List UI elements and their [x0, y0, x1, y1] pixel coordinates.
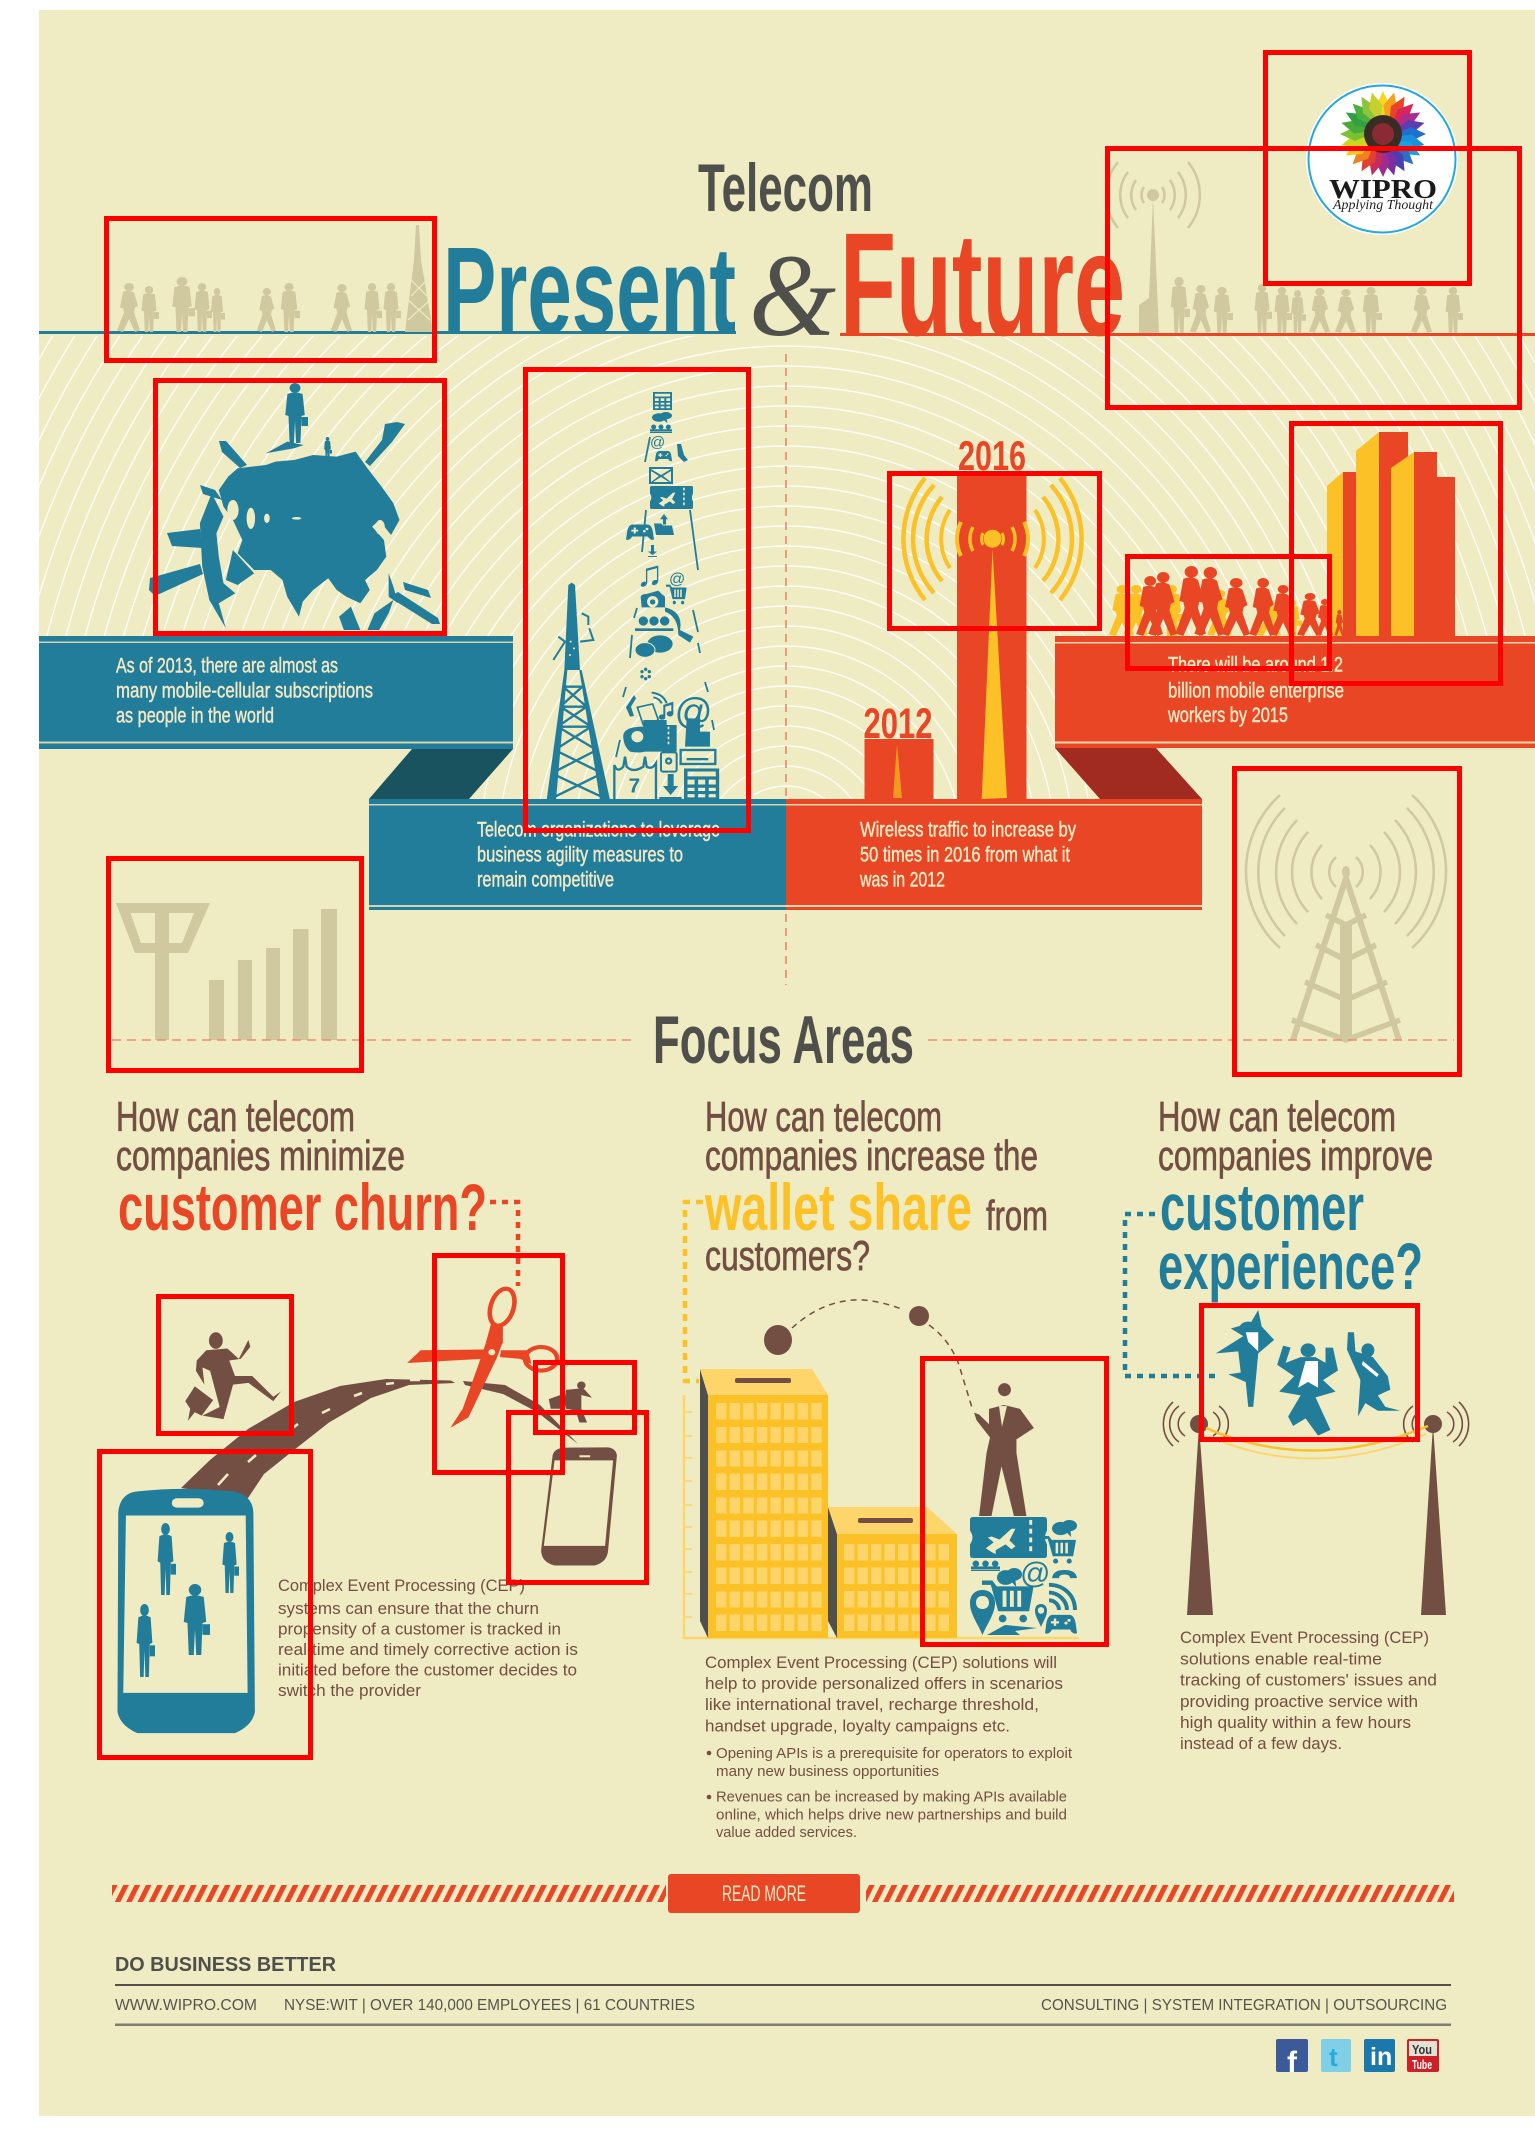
upper stacked icons: @: [669, 571, 685, 588]
title: Future: Future: [840, 203, 1125, 367]
road between phones: [181, 1379, 578, 1498]
tower outline dashes: [616, 437, 714, 757]
column 1 body text: propensity of a customer is tracked in: [278, 1620, 561, 1638]
icon: facebook: [1276, 2039, 1308, 2079]
year 2012 label: 2012: [864, 700, 932, 748]
figures round the globe: [149, 422, 440, 624]
teal band: subscriptions: [39, 636, 513, 749]
teal horizon line: [39, 331, 736, 334]
social icons: [1276, 2039, 1439, 2079]
column 1 body text: systems can ensure that the churn: [278, 1600, 539, 1618]
question 3: companies improve: [1158, 1132, 1433, 1179]
column 3 body text: solutions enable real-time: [1180, 1650, 1382, 1668]
question 1: customer churn?: [118, 1170, 487, 1244]
customers on screen: [137, 1523, 239, 1677]
big teal phone with customers: [118, 1489, 255, 1733]
footer website: WWW.WIPRO.COM: [115, 1997, 257, 2014]
dotted connector: wallet share: [685, 1202, 703, 1381]
column 2 body text: Complex Event Processing (CEP) solutions will: [705, 1654, 1057, 1672]
question 3: [1158, 1093, 1433, 1303]
signal bars icon: [116, 903, 337, 1040]
column 3 body text: tracking of customers' issues and: [1180, 1672, 1437, 1690]
bullet points: value added services.: [716, 1824, 857, 1841]
focus areas divider left: [112, 1039, 633, 1041]
sunflower mark: [1340, 91, 1426, 177]
tall building: [700, 1369, 828, 1638]
ribbon fold right: [1055, 748, 1202, 799]
signal waves: [903, 478, 1082, 600]
dotted connector: churn: [490, 1202, 518, 1286]
centre dashed divider: [785, 354, 787, 985]
upper stacked icons: @: [650, 434, 665, 451]
question 1: How can telecom: [116, 1093, 355, 1140]
ribbon text: 50 times in 2016 from what it: [860, 844, 1070, 867]
upper stacked icons: ♫: [636, 553, 663, 594]
column 3 body text: Complex Event Processing (CEP): [1180, 1629, 1429, 1647]
bullet points: many new business opportunities: [716, 1763, 939, 1780]
antenna with signal: [1106, 162, 1200, 333]
read more button: [668, 1874, 860, 1913]
2012 bar with label: [864, 700, 934, 799]
antenna spike: [982, 549, 1007, 799]
bullet points: Opening APIs is a prerequisite for operators to exploit: [716, 1745, 1073, 1762]
lower stacked icons: 7: [629, 775, 640, 798]
footer slogan: DO BUSINESS BETTER: [115, 1954, 337, 1976]
ribbon text: business agility measures to: [477, 844, 683, 867]
jumping customers trio: [1216, 1310, 1400, 1436]
footer company facts: NYSE:WIT | OVER 140,000 EMPLOYEES | 61 COUNTRIES: [284, 1997, 695, 2014]
ribbon text: remain competitive: [477, 869, 614, 892]
icon: youtube: Tube: [1412, 2057, 1432, 2072]
question 2: wallet share: [704, 1170, 972, 1244]
column 1 body text: switch the provider: [278, 1682, 422, 1700]
piggy bank buildings chart: [684, 1369, 1079, 1638]
column 3 body text: providing proactive service with: [1180, 1693, 1418, 1711]
icon: facebook: f: [1287, 2046, 1298, 2079]
title: Present: Present: [443, 223, 736, 360]
year 2016 label: 2016: [958, 432, 1026, 479]
hatched divider left: [112, 1885, 666, 1902]
orange band: enterprise workers: [1055, 636, 1535, 748]
icon: twitter: t: [1329, 2042, 1338, 2072]
column 2 body text: handset upgrade, loyalty campaigns etc.: [705, 1718, 1010, 1736]
column 1 body text: Complex Event Processing (CEP): [278, 1577, 525, 1595]
bullet points: online, which helps drive new partnerships and build: [716, 1806, 1067, 1824]
lattice tower: [547, 583, 610, 800]
question 2: customers?: [705, 1232, 870, 1279]
continent and crescent: [200, 442, 399, 630]
red annotation boxes: [100, 52, 1520, 1758]
Wipro logo: [1306, 83, 1458, 235]
title: Telecom: Telecom: [698, 150, 873, 226]
standing man on top: [285, 383, 308, 443]
icon: youtube: [1407, 2039, 1439, 2072]
centre ribbon orange half: [786, 799, 1202, 910]
icon: youtube: You: [1412, 2042, 1432, 2057]
icon: linkedin: in: [1370, 2043, 1392, 2071]
running man: [549, 1382, 592, 1423]
read more button: READ MORE: [722, 1881, 806, 1906]
right skyline silhouettes: [1106, 162, 1463, 333]
ribbon text: Telecom organizations to leverage: [477, 819, 720, 842]
bullet points: Revenues can be increased by making APIs available: [716, 1789, 1067, 1806]
column 3 body text: instead of a few days.: [1180, 1735, 1342, 1753]
column 2 body text: help to provide personalized offers in scenarios: [705, 1675, 1063, 1693]
short building: [828, 1507, 957, 1638]
icon: linkedin: [1364, 2039, 1395, 2072]
band text: billion mobile enterprise: [1168, 680, 1344, 702]
walking workers: [1109, 566, 1344, 636]
rising buildings chart: [1327, 432, 1455, 636]
band text: workers by 2015: [1167, 704, 1288, 727]
ribbon fold left: [369, 749, 513, 799]
jumping businessman: [185, 1332, 281, 1421]
ribbon text: was in 2012: [859, 869, 945, 892]
column 2 body text: [705, 1654, 1073, 1841]
icon: twitter: [1321, 2039, 1351, 2072]
antenna icon tower of apps: [547, 392, 719, 801]
connected antenna towers: [1163, 1402, 1469, 1615]
left skyline silhouettes: [117, 225, 433, 332]
band text: As of 2013, there are almost as: [116, 655, 338, 678]
title: ampersand: &: [749, 230, 836, 361]
ribbon text: Wireless traffic to increase by: [860, 819, 1076, 842]
footer rule bottom: [115, 2024, 1451, 2026]
customer offers icon cluster: @: [1020, 1557, 1050, 1590]
question 2: How can telecom: [705, 1093, 942, 1140]
radio tower icon: [1246, 795, 1446, 1040]
coin toss: [764, 1300, 973, 1411]
heading: Focus Areas: Focus Areas: [653, 1002, 914, 1078]
question 3: experience?: [1158, 1229, 1423, 1303]
globe with figures: [149, 383, 440, 630]
focus areas divider right: [928, 1039, 1454, 1041]
question 2: [704, 1093, 1048, 1279]
hatched divider right: [866, 1885, 1454, 1902]
logo tagline: Applying Thought: [1332, 197, 1434, 212]
businessman on icons: [974, 1383, 1034, 1516]
lattice tower left skyline: [405, 225, 433, 332]
concentric signal arcs background: [39, 336, 1535, 799]
bullet points: [707, 1745, 1073, 1841]
chart axis: [684, 1395, 1079, 1638]
lower stacked icons: @: [675, 690, 713, 732]
column 1 body text: initiated before the customer decides to: [278, 1662, 577, 1680]
footer rule top: [115, 1984, 1451, 1986]
band text: many mobile-cellular subscriptions: [116, 680, 373, 702]
column 1 body text: real time and timely corrective action is: [278, 1641, 578, 1659]
question 2: companies increase the: [705, 1132, 1038, 1179]
question 1: companies minimize: [116, 1132, 405, 1179]
question 2: from: [986, 1192, 1048, 1239]
lower stacked icons: [614, 585, 719, 801]
2016 tall bar: [903, 471, 1082, 799]
dotted connector: customer experience: [1125, 1214, 1221, 1376]
orange horizon line: [840, 333, 1535, 336]
WIPRO wordmark: WIPRO: [1329, 174, 1437, 204]
question 3: How can telecom: [1158, 1093, 1396, 1140]
centre ribbon teal half: [369, 799, 786, 910]
column 3 body text: high quality within a few hours: [1180, 1714, 1411, 1732]
upper stacked icons: [626, 392, 693, 594]
band text: as people in the world: [116, 705, 274, 728]
small brown phone: [541, 1447, 617, 1565]
column 2 body text: like international travel, recharge threshold,: [705, 1696, 1039, 1714]
scissors cutting road: [407, 1286, 557, 1428]
question 1: [116, 1093, 487, 1244]
customer offers icon cluster: [970, 1517, 1077, 1635]
question 3: customer: [1160, 1170, 1364, 1244]
band text: There will be around 1.2: [1168, 654, 1343, 677]
footer services: CONSULTING | SYSTEM INTEGRATION | OUTSOURCING: [1041, 1997, 1447, 2014]
